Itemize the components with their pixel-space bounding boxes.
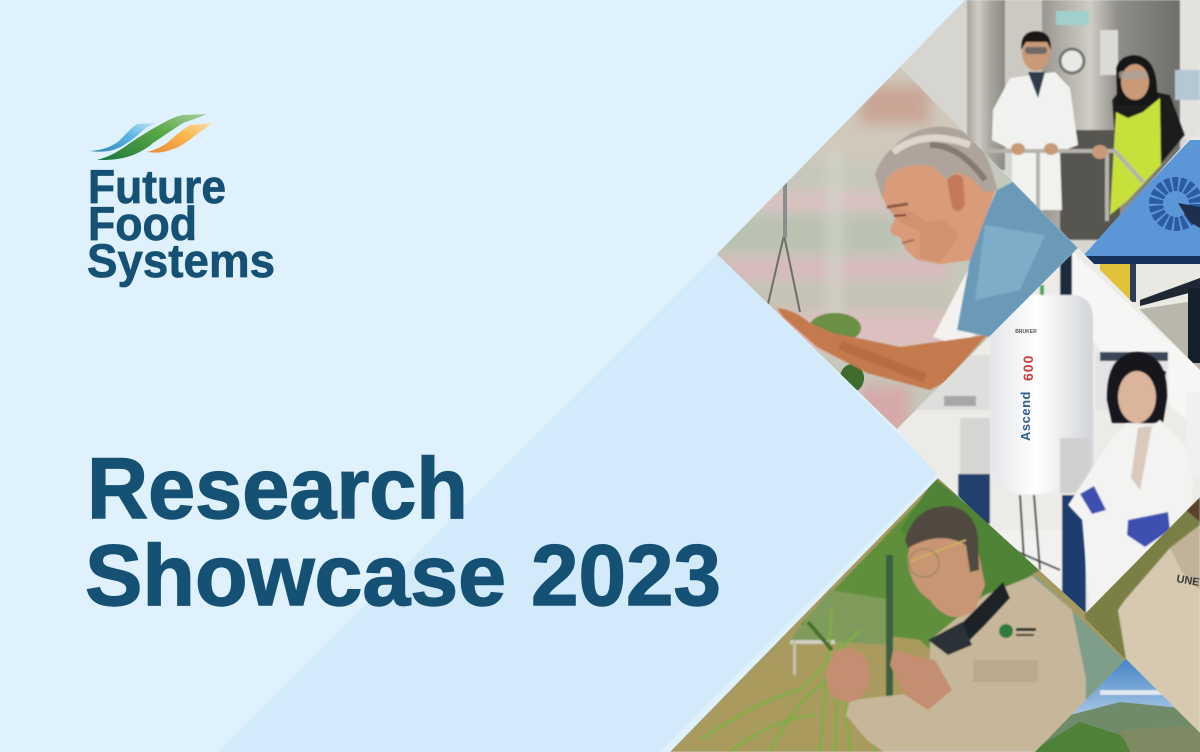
railing <box>988 151 1143 182</box>
shirt logo: UNE <box>1175 573 1200 589</box>
arm <box>777 308 987 390</box>
darker background panel <box>218 254 938 752</box>
logo <box>87 114 275 287</box>
shirt <box>846 576 1086 752</box>
title: 2023 <box>531 528 721 624</box>
woman in hi-vis vest <box>1112 85 1185 165</box>
title: Research <box>87 441 468 537</box>
label: BRUKER: BRUKER <box>1015 329 1037 335</box>
logo wordmark <box>87 160 275 287</box>
logo wordmark: Future <box>88 160 226 213</box>
woman in lab coat <box>1068 352 1193 612</box>
shirt <box>957 182 1078 337</box>
title: Showcase <box>85 528 506 624</box>
photo: interactive table <box>1075 130 1200 370</box>
label: 600: 600 <box>1020 355 1036 381</box>
photo: pilot plant researchers <box>900 0 1200 270</box>
man in lab coat <box>992 72 1078 210</box>
photo: NMR spectrometer and researcher <box>890 240 1200 620</box>
label: Ascend: Ascend <box>1018 391 1033 441</box>
photo: researcher in greenhouse <box>710 60 1090 435</box>
logo wordmark: Food <box>88 197 197 250</box>
title <box>85 441 721 624</box>
head <box>908 530 985 617</box>
photo: aerial landscape <box>1030 655 1200 752</box>
logo swoosh <box>90 114 213 160</box>
photo: UNE researcher <box>1085 497 1200 752</box>
head <box>879 165 997 264</box>
photo: researcher inspecting plants in field <box>670 478 1130 752</box>
logo wordmark: Systems <box>87 234 275 287</box>
